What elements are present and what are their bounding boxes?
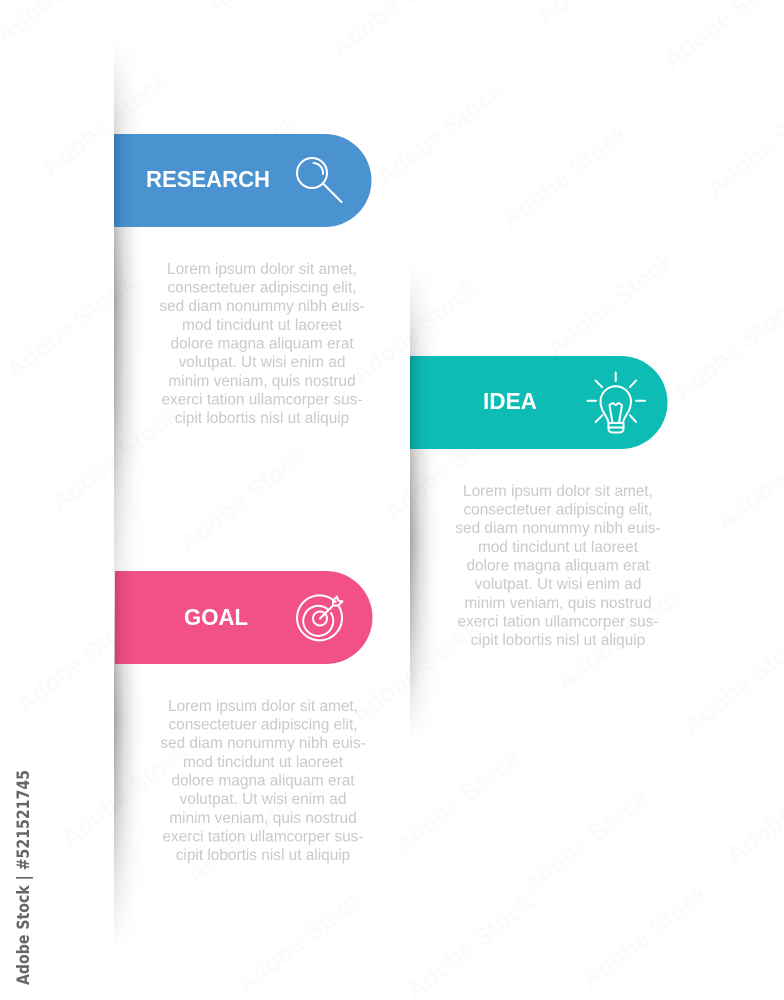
watermark pattern: Adobe Stock bbox=[231, 884, 369, 1000]
text block: research: exerci tation ullamcorper sus- bbox=[161, 392, 363, 408]
text block: goal: cipit lobortis nisl ut aliquip bbox=[176, 847, 350, 864]
icon: light bulb bbox=[588, 372, 645, 433]
watermark pattern: Adobe Stock bbox=[1, 269, 139, 385]
banner: research bbox=[114, 134, 372, 227]
watermark pattern: Adobe Stock bbox=[388, 744, 526, 860]
watermark pattern: Adobe Stock bbox=[576, 879, 714, 995]
text block: idea: exerci tation ullamcorper sus- bbox=[457, 614, 659, 630]
text block: research: consectetuer adipiscing elit, bbox=[167, 280, 357, 296]
paper shadow: right column bbox=[410, 282, 430, 723]
text block: goal: consectetuer adipiscing elit, bbox=[168, 716, 358, 734]
watermark pattern: Adobe Stock bbox=[541, 247, 679, 363]
text block: research: sed diam nonummy nibh euis- bbox=[159, 298, 365, 315]
text block: research: volutpat. Ut wisi enim ad bbox=[179, 354, 345, 371]
text block: idea: minim veniam, quis nostrud bbox=[464, 595, 652, 612]
text block: goal: sed diam nonummy nibh euis- bbox=[160, 735, 366, 752]
text block: goal: Lorem ipsum dolor sit amet, bbox=[168, 698, 358, 715]
banner: goal bbox=[115, 571, 372, 664]
text block: idea: mod tincidunt ut laoreet bbox=[478, 539, 639, 556]
text block: idea: consectetuer adipiscing elit, bbox=[463, 502, 653, 518]
text block: research: dolore magna aliquam erat bbox=[170, 336, 354, 352]
text block: research bbox=[159, 261, 365, 427]
text block: research: minim veniam, quis nostrud bbox=[168, 373, 356, 390]
stock credit label: Adobe Stock | #521521745 bbox=[14, 770, 34, 985]
watermark pattern: Adobe Stock bbox=[46, 401, 184, 517]
text block: idea: dolore magna aliquam erat bbox=[466, 558, 650, 574]
text block: idea: cipit lobortis nisl ut aliquip bbox=[471, 632, 645, 649]
text block: idea: Lorem ipsum dolor sit amet, bbox=[463, 483, 653, 500]
watermark pattern: Adobe Stock bbox=[166, 109, 304, 225]
text block: research: cipit lobortis nisl ut aliquip bbox=[175, 410, 349, 427]
watermark pattern: Adobe Stock bbox=[181, 774, 319, 890]
paper shadow: left column bbox=[114, 60, 134, 928]
text block: idea: volutpat. Ut wisi enim ad bbox=[475, 576, 641, 593]
text block: goal: dolore magna aliquam erat bbox=[171, 772, 355, 790]
text block: goal bbox=[160, 698, 366, 864]
text block: idea bbox=[455, 483, 661, 649]
text block: goal: minim veniam, quis nostrud bbox=[169, 810, 357, 827]
text block: goal: mod tincidunt ut laoreet bbox=[183, 754, 344, 771]
text block: goal: exerci tation ullamcorper sus- bbox=[162, 828, 364, 846]
watermark pattern: Adobe Stock bbox=[56, 737, 194, 853]
watermark pattern: Adobe Stock bbox=[36, 67, 174, 183]
watermark pattern: Adobe Stock bbox=[174, 442, 312, 558]
watermark pattern: Adobe Stock bbox=[11, 604, 149, 720]
watermark pattern: Adobe Stock bbox=[496, 119, 634, 235]
watermark pattern: Adobe Stock bbox=[378, 411, 516, 527]
heading: goal: GOAL bbox=[184, 604, 248, 630]
watermark pattern: Adobe Stock bbox=[516, 784, 654, 900]
watermark pattern: Adobe Stock bbox=[371, 77, 509, 193]
icon: magnifying glass bbox=[297, 158, 342, 202]
watermark pattern: Adobe Stock bbox=[346, 614, 484, 730]
banner: idea bbox=[410, 356, 668, 449]
heading: research: RESEARCH bbox=[146, 166, 270, 192]
watermark pattern: Adobe Stock bbox=[551, 581, 689, 697]
text block: research: mod tincidunt ut laoreet bbox=[182, 317, 343, 334]
icon: target bbox=[297, 595, 342, 640]
heading: idea: IDEA bbox=[483, 388, 537, 414]
text block: research: Lorem ipsum dolor sit amet, bbox=[167, 261, 357, 278]
text block: goal: volutpat. Ut wisi enim ad bbox=[180, 791, 346, 808]
watermark pattern: Adobe Stock bbox=[346, 274, 484, 390]
text block: idea: sed diam nonummy nibh euis- bbox=[455, 520, 661, 537]
